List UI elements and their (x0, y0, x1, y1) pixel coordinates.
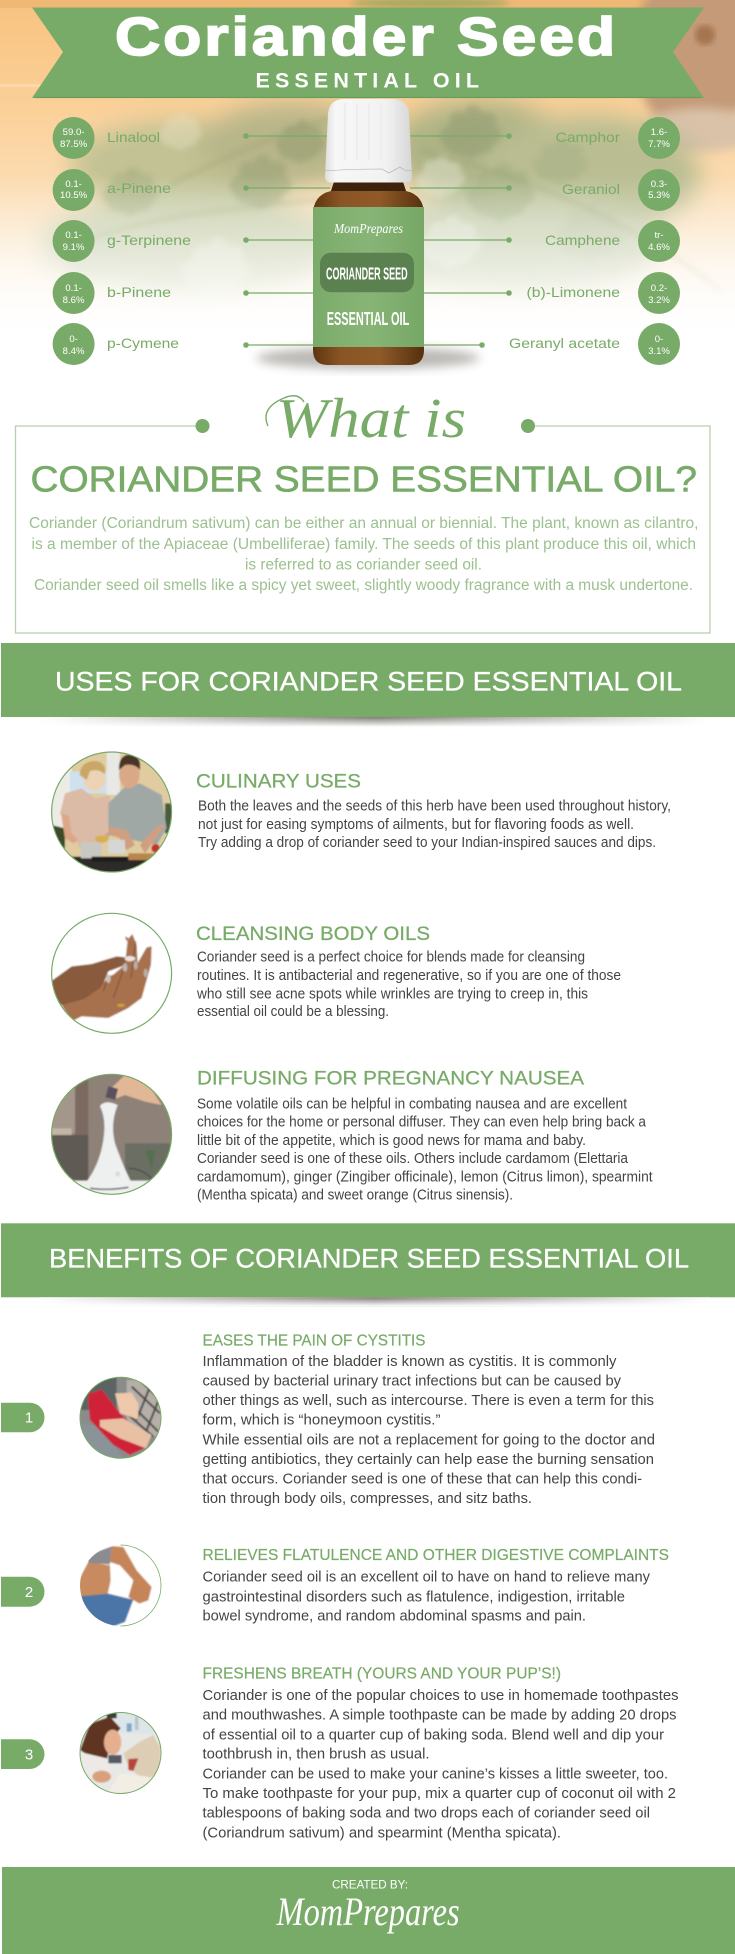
background photo: herbs on table (0, 0, 735, 302)
heading: FRESHENS BREATH (YOURS AND YOUR PUP’S!) (202, 1665, 561, 1682)
photo: couple cooking (51, 751, 172, 873)
bottle: ESSENTIAL OIL (327, 308, 409, 329)
connector lines (244, 134, 511, 347)
(b)-Limonene: 3.2% (648, 295, 670, 306)
Linalool: 59.0- (63, 127, 85, 138)
b-Pinene: 8.6% (63, 295, 85, 306)
Geraniol: 0.3- (651, 179, 667, 190)
what is panel (16, 388, 710, 633)
photo: hot water bottle (80, 1376, 162, 1459)
Geranyl acetate (509, 323, 680, 365)
footer (2, 1867, 735, 1954)
a-Pinene: a-Pinene (107, 180, 171, 196)
script heading: What is (276, 388, 466, 450)
p-Cymene: 8.4% (63, 346, 85, 357)
photo: waist and jeans (80, 1544, 162, 1626)
body text: tion through body oils, compresses, and sitz baths. (202, 1490, 532, 1507)
body text: Some volatile oils can be helpful in combating nausea and are excellent (197, 1095, 628, 1112)
g-Terpinene (53, 220, 191, 262)
body text: caused by bacterial urinary tract infections but can be caused by (202, 1373, 621, 1390)
Linalool (53, 117, 160, 159)
Camphene (545, 220, 680, 262)
uses section header: USES FOR CORIANDER SEED ESSENTIAL OIL (55, 667, 682, 697)
cleansing body oils (51, 912, 620, 1034)
bottle: MomPrepares (333, 222, 403, 237)
a-Pinene: 0.1- (65, 179, 82, 190)
g-Terpinene: 0.1- (65, 230, 82, 241)
left chemical constituents (53, 117, 191, 365)
benefits section header (1, 1223, 735, 1306)
Geranyl acetate: Geranyl acetate (509, 335, 620, 351)
body text: essential oil could be a blessing. (197, 1003, 389, 1020)
title: Coriander Seed (115, 7, 618, 67)
body text: Inflammation of the bladder is known as cystitis. It is commonly (202, 1353, 617, 1370)
photo: diffuser (51, 1074, 172, 1195)
number badge: 3 (25, 1746, 33, 1764)
Camphor (556, 117, 680, 159)
body text: little bit of the appetite, which is good news for mama and baby. (197, 1132, 586, 1149)
body text: bowel syndrome, and random abdominal spasms and pain. (202, 1608, 586, 1625)
diffusing for pregnancy nausea (45, 1067, 653, 1205)
body text: that occurs. Coriander seed is one of these that can help this condi- (202, 1470, 642, 1487)
body text: Coriander is one of the popular choices to use in homemade toothpastes (202, 1687, 678, 1704)
body text: (Coriandrum sativum) and spearmint (Mentha spicata). (202, 1824, 561, 1841)
body text (202, 1353, 655, 1507)
body text (196, 949, 621, 1020)
Linalool: 87.5% (60, 139, 88, 150)
bottle glass (313, 182, 424, 365)
Camphene: Camphene (545, 232, 620, 248)
body text: form, which is “honeymoon cystitis.” (202, 1411, 440, 1428)
subtitle: ESSENTIAL OIL (256, 68, 479, 92)
body text: of essential oil to a quarter cup of baking soda. Blend well and dip your (202, 1726, 664, 1743)
intro text: is referred to as coriander seed oil. (245, 556, 482, 574)
body text: cardamomum), ginger (Zingiber officinale), lemon (Citrus limon), spearmint (197, 1168, 653, 1185)
body text: routines. It is antibacterial and regenerative, so if you are one of those (197, 967, 621, 984)
title banner (32, 7, 704, 98)
body text: other things as well, such as intercourse. There is even a term for this (202, 1392, 654, 1409)
intro text (29, 515, 698, 594)
heading: CLEANSING BODY OILS (196, 923, 430, 945)
a-Pinene (53, 169, 171, 211)
intro text: Coriander (Coriandrum sativum) can be either an annual or biennial. The plant, known as cilantro, (29, 515, 698, 532)
body text: choices for the home or personal diffuser. They can even help bring back a (197, 1114, 647, 1131)
b-Pinene: 0.1- (65, 283, 82, 294)
body text: gastrointestinal disorders such as flatulence, indigestion, irritable (202, 1588, 625, 1605)
body text: Coriander seed is one of these oils. Others include cardamom (Elettaria (197, 1150, 629, 1167)
photo: hands with cream (51, 912, 172, 1034)
photo: woman with dog (80, 1712, 162, 1794)
(b)-Limonene (526, 272, 680, 314)
Camphor: 7.7% (648, 139, 670, 150)
number badge (1, 1403, 44, 1432)
number badge (1, 1577, 45, 1607)
b-Pinene (53, 272, 171, 314)
g-Terpinene: g-Terpinene (107, 232, 191, 248)
heading: CULINARY USES (196, 770, 361, 792)
a-Pinene: 10.5% (60, 190, 88, 201)
body text: Both the leaves and the seeds of this herb have been used throughout history, (198, 798, 671, 815)
bottle cap (325, 99, 412, 182)
main heading: CORIANDER SEED ESSENTIAL OIL? (30, 459, 697, 500)
body text: not just for easing symptoms of ailments, but for flavoring foods as well. (198, 816, 634, 833)
g-Terpinene: 9.1% (63, 242, 85, 253)
number badge (1, 1739, 45, 1769)
Camphene: tr- (654, 230, 664, 241)
body text: getting antibiotics, they certainly can help ease the burning sensation (202, 1451, 654, 1468)
body text: While essential oils are not a replacement for going to the doctor and (202, 1431, 655, 1448)
Geranyl acetate: 3.1% (648, 346, 670, 357)
heading: DIFFUSING FOR PREGNANCY NAUSEA (197, 1067, 584, 1089)
intro text: is a member of the Apiaceae (Umbelliferae) family. The seeds of this plant produce this oil, which (32, 536, 696, 553)
Camphene: 4.6% (648, 242, 670, 253)
right chemical constituents (509, 117, 680, 365)
body text (197, 1095, 653, 1204)
benefit 1 (1, 1333, 655, 1507)
bottle: CORIANDER SEED (326, 263, 408, 283)
bottle label (313, 207, 424, 347)
body text: Coriander can be used to make your canine’s kisses a little sweeter, too. (202, 1766, 668, 1783)
body text: toothbrush in, then brush as usual. (202, 1746, 430, 1763)
body text (202, 1687, 678, 1841)
benefit 3 (1, 1665, 678, 1841)
Geranyl acetate: 0- (655, 334, 663, 345)
p-Cymene (53, 323, 179, 365)
body text: Try adding a drop of coriander seed to your Indian-inspired sauces and dips. (198, 834, 656, 851)
Camphor: 1.6- (651, 127, 667, 138)
created by label: CREATED BY: (332, 1879, 408, 1891)
benefit 2 (1, 1544, 668, 1626)
b-Pinene: b-Pinene (107, 284, 171, 300)
body text: who still see acne spots while wrinkles are trying to creep in, this (196, 985, 588, 1002)
benefits section header: BENEFITS OF CORIANDER SEED ESSENTIAL OIL (49, 1243, 689, 1273)
culinary uses (51, 751, 670, 873)
body text: (Mentha spicata) and sweet orange (Citrus sinensis). (197, 1187, 513, 1204)
heading: EASES THE PAIN OF CYSTITIS (202, 1333, 426, 1350)
bottle (256, 99, 480, 369)
heading: RELIEVES FLATULENCE AND OTHER DIGESTIVE COMPLAINTS (202, 1547, 669, 1564)
Geraniol (562, 169, 680, 211)
body text (198, 798, 671, 851)
(b)-Limonene: 0.2- (651, 283, 667, 294)
panel border (16, 426, 710, 633)
brand script: MomPrepares (276, 1889, 460, 1934)
body text (202, 1569, 650, 1625)
Camphor: Camphor (556, 129, 620, 145)
intro text: Coriander seed oil smells like a spicy yet sweet, slightly woody fragrance with a musk undertone. (34, 577, 693, 594)
p-Cymene: p-Cymene (107, 335, 179, 351)
body text: and mouthwashes. A simple toothpaste can be made by adding 20 drops (202, 1707, 676, 1724)
(b)-Limonene: (b)-Limonene (526, 284, 620, 300)
uses section header (1, 643, 735, 727)
body text: tablespoons of baking soda and two drops each of coriander seed oil (202, 1805, 650, 1822)
p-Cymene: 0- (69, 334, 78, 345)
Geraniol: Geraniol (562, 181, 620, 197)
body text: To make toothpaste for your pup, mix a quarter cup of coconut oil with 2 (202, 1785, 676, 1802)
body text: Coriander seed oil is an excellent oil to have on hand to relieve many (202, 1569, 650, 1586)
number badge: 2 (25, 1584, 33, 1601)
Geraniol: 5.3% (648, 190, 670, 201)
body text: Coriander seed is a perfect choice for blends made for cleansing (197, 949, 585, 966)
Linalool: Linalool (107, 129, 160, 145)
number badge: 1 (25, 1410, 33, 1426)
